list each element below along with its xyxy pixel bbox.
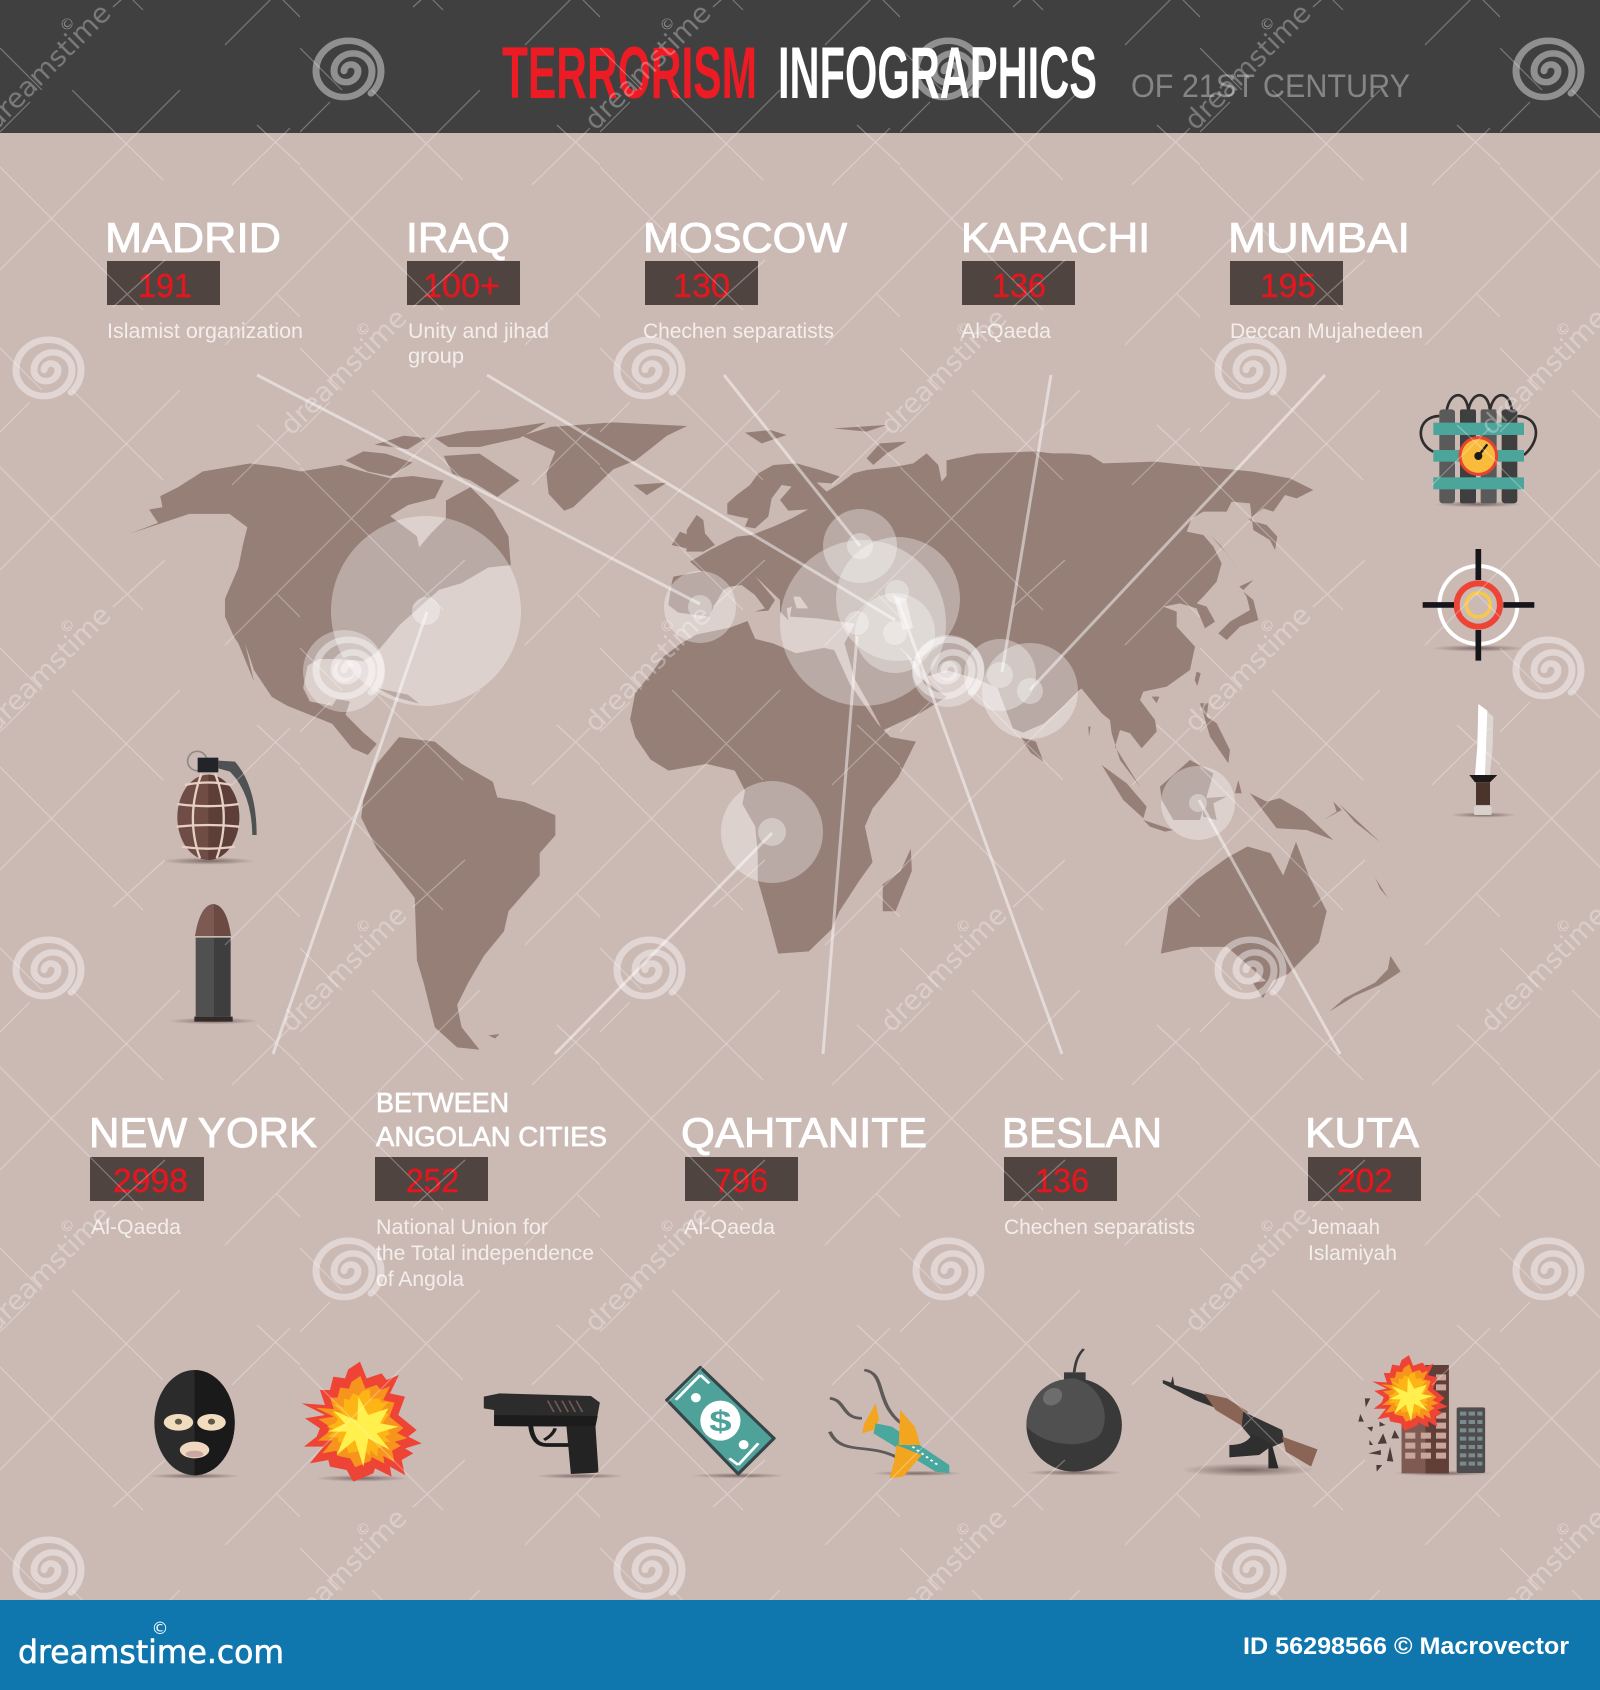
label: Moscow <box>643 214 847 343</box>
watermark overlay: © <box>656 1215 679 1238</box>
watermark overlay: © <box>56 1215 79 1238</box>
label: Karachi: KARACHI <box>961 214 1150 261</box>
label: Beslan: 136 <box>1035 1162 1089 1199</box>
label: Madrid <box>105 214 303 343</box>
watermark overlay: dreamstime <box>875 900 1013 1038</box>
map: Americas <box>129 422 687 1050</box>
watermark overlay: © <box>952 318 975 341</box>
label: Moscow: MOSCOW <box>643 214 847 261</box>
label: Kuta <box>1305 1109 1421 1265</box>
label: Moscow: 130 <box>673 267 730 304</box>
label: Mumbai: MUMBAI <box>1228 214 1410 261</box>
label: New York: Al-Qaeda <box>91 1216 181 1239</box>
label: Moscow: Chechen separatists <box>643 320 834 343</box>
icon: bullet <box>168 904 258 1024</box>
header band <box>0 0 1600 133</box>
label: Between Angolan cities: ANGOLAN CITIES <box>376 1121 607 1152</box>
label: Iraq: 100+ <box>423 267 500 304</box>
label: Madrid: Islamist organization <box>107 320 303 343</box>
watermark overlay: dreamstime <box>579 1200 717 1338</box>
label: Between Angolan cities: the Total independence <box>376 1242 594 1265</box>
icon: grenade <box>162 751 257 865</box>
watermark overlay: © <box>352 318 375 341</box>
label: New York: 2998 <box>113 1162 188 1199</box>
footer bar: dreamstime.com <box>18 1633 284 1671</box>
connector lines <box>257 375 1340 1054</box>
watermark overlay: dreamstime <box>1179 0 1317 136</box>
watermark overlay: © <box>1552 1518 1575 1541</box>
label: Mumbai <box>1228 214 1423 343</box>
label: Iraq: Unity and jihad <box>408 320 549 343</box>
icon: assault rifle <box>1163 1376 1318 1477</box>
label: Qahtanite: Al-Qaeda <box>684 1216 775 1239</box>
watermark overlay: © <box>56 13 79 36</box>
map: Asia, Africa, Australia <box>630 451 1401 1012</box>
label: Madrid: MADRID <box>105 214 281 261</box>
icon: banknote: $ <box>709 1405 732 1438</box>
label: Qahtanite <box>681 1109 927 1239</box>
icon: round bomb <box>1026 1349 1122 1476</box>
label: Iraq: group <box>408 345 464 368</box>
label: Mumbai: Deccan Mujahedeen <box>1230 320 1423 343</box>
watermark overlay: dreamstime <box>275 900 413 1038</box>
watermark overlay: © <box>1256 615 1279 638</box>
title: INFOGRAPHICS <box>778 33 1097 114</box>
label: Kuta: Jemaah <box>1308 1216 1380 1239</box>
map: East Asia <box>1040 453 1342 840</box>
watermark overlay: © <box>656 615 679 638</box>
label: Karachi <box>961 214 1150 343</box>
panel: top attack labels <box>105 214 1423 368</box>
watermark overlay: © <box>352 1518 375 1541</box>
watermark overlay: © <box>1256 13 1279 36</box>
world map <box>129 422 1401 1050</box>
attack location circles <box>303 509 1235 883</box>
label: Iraq: IRAQ <box>406 214 510 261</box>
label: Mumbai: 195 <box>1260 267 1316 304</box>
label: Madrid: 191 <box>138 267 192 304</box>
watermark overlay: dreamstime <box>579 600 717 738</box>
icon: explosion <box>302 1362 422 1482</box>
label: Karachi: Al-Qaeda <box>961 320 1051 343</box>
watermark overlay: dreamstime <box>875 303 1013 441</box>
watermark overlay: © <box>656 13 679 36</box>
watermark overlay: © <box>352 915 375 938</box>
watermark overlay: dreamstime <box>275 1503 413 1641</box>
watermark overlay: dreamstime <box>1179 600 1317 738</box>
label: New York: NEW YORK <box>89 1109 317 1156</box>
label: Qahtanite: 796 <box>714 1162 768 1199</box>
panel: bottom attack labels <box>89 1087 1421 1291</box>
label: Beslan <box>1002 1109 1195 1239</box>
title <box>502 33 1410 114</box>
watermark overlay: © <box>952 915 975 938</box>
label: Karachi: 136 <box>992 267 1046 304</box>
watermark overlay: dreamstime <box>875 1503 1013 1641</box>
icon: dynamite <box>1421 395 1536 507</box>
watermark overlay: © <box>56 615 79 638</box>
label: Beslan: BESLAN <box>1002 1109 1162 1156</box>
footer bar <box>0 1600 1600 1690</box>
icon: exploding building <box>1358 1355 1493 1476</box>
icon: target crosshair <box>1423 549 1534 661</box>
footer bar: © <box>152 1619 168 1639</box>
label: Beslan: Chechen separatists <box>1004 1216 1195 1239</box>
label: Kuta: 202 <box>1337 1162 1393 1199</box>
label: Between Angolan cities: of Angola <box>376 1268 464 1291</box>
footer bar: ID 56298566 © Macrovector <box>1243 1633 1569 1660</box>
watermark overlay: © <box>1552 915 1575 938</box>
icon: crashing plane <box>830 1370 963 1478</box>
watermark overlay: © <box>952 1518 975 1541</box>
icon: balaclava mask <box>148 1370 241 1479</box>
map: Europe <box>668 425 960 630</box>
label: New York <box>89 1109 317 1239</box>
label: Qahtanite: QAHTANITE <box>681 1109 927 1156</box>
label: Kuta: Islamiyah <box>1308 1242 1397 1265</box>
watermark overlay: © <box>1552 318 1575 341</box>
icon: knife <box>1450 704 1517 818</box>
label: Between Angolan cities <box>375 1087 607 1291</box>
label: Kuta: KUTA <box>1305 1109 1419 1156</box>
watermark overlay: © <box>1256 1215 1279 1238</box>
watermark overlay: dreamstime <box>1179 1200 1317 1338</box>
watermark overlay: dreamstime <box>275 303 413 441</box>
label: Iraq <box>406 214 549 368</box>
icon: pistol <box>484 1393 624 1479</box>
label: Between Angolan cities: National Union for <box>376 1216 548 1239</box>
icon: banknote <box>667 1367 785 1478</box>
label: Between Angolan cities: 252 <box>406 1162 459 1199</box>
watermark overlay: dreamstime <box>579 0 717 136</box>
title: TERRORISM <box>502 33 757 114</box>
label: Between Angolan cities: BETWEEN <box>376 1087 509 1118</box>
title: OF 21ST CENTURY <box>1131 68 1410 104</box>
